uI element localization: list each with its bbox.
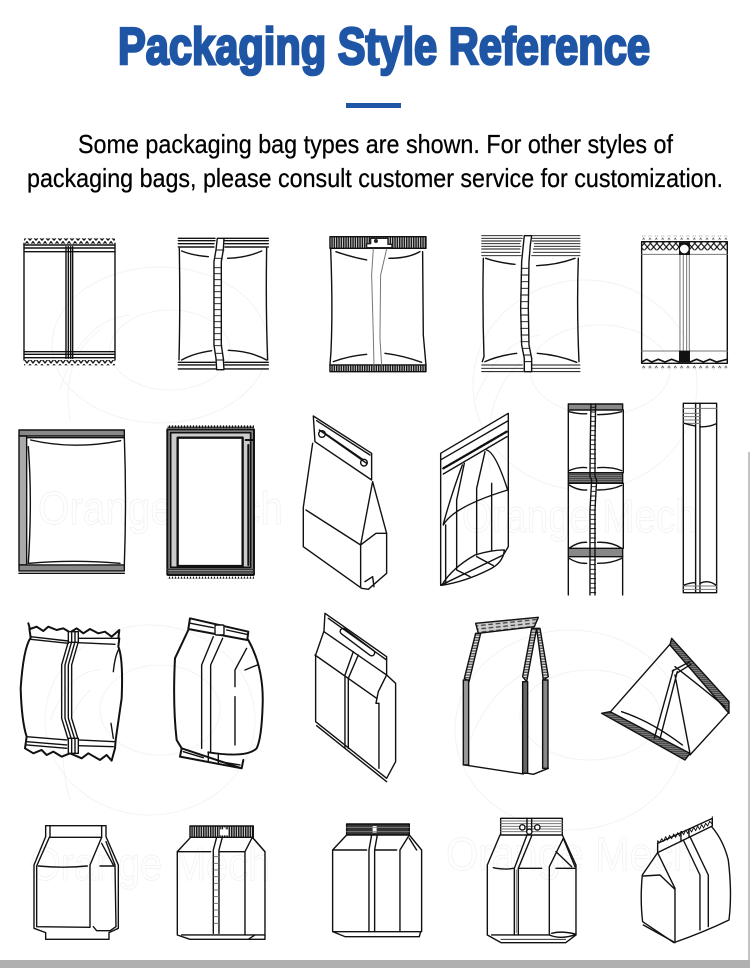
bag 5: serrated bag with round hang hole and dark seam ends	[642, 236, 727, 370]
watermark: Orange Mech text row 4 left: Orange Mech	[30, 838, 270, 890]
right edge line	[748, 452, 750, 960]
bag 1: three-side seal with serrated edges	[24, 238, 115, 365]
bottom grey bar	[0, 960, 750, 968]
subtitle line 1: Some packaging bag types are shown. For other styles of	[78, 129, 674, 159]
bag 12: pillow bag with serrated crimp	[21, 623, 122, 761]
bag 13: bottle-shaped gusset bag	[174, 618, 263, 768]
divider bar	[346, 103, 401, 108]
watermark: Orange Mech text row 2 left: Orange Mech	[38, 482, 283, 534]
bag 15: block-bottom bag with hatched seals	[463, 617, 548, 774]
bag 4: pillow bag with ribbed seal	[482, 236, 580, 372]
bag 6: flat pouch with grey seal bands	[19, 430, 125, 573]
bag 18: square-bottom bag with hatched seal and euro slot	[177, 826, 265, 939]
bag 8: stand-up zipper pouch with flat bottom	[303, 416, 387, 589]
bag 11: narrow stick pack	[683, 403, 717, 593]
bag 19: square-bottom bag with dark seal	[333, 824, 422, 937]
bag 21: side gusset coffee bag with serrated top	[641, 817, 730, 943]
bag 3: pillow bag with hatched seals and hang hole	[330, 237, 426, 372]
bag 10: continuous pillow bags with chain seam	[568, 404, 623, 595]
bag 7: four-side seal pouch with serrated edge	[167, 425, 254, 579]
watermark: swirl logos	[45, 267, 697, 830]
bag 20: square-bottom bag with ribbed seal and hang holes	[487, 818, 576, 943]
bag 2: pillow bag with ladder seam	[178, 238, 268, 370]
bag 9: stand-up zipper doypack	[441, 413, 508, 585]
bag 14: gusset bag with handle slot	[315, 613, 396, 782]
watermark: Orange Mech text row 2 right: Orange Mech	[462, 490, 697, 542]
bag 16: tetrahedron pyramid bag	[602, 638, 729, 760]
watermark: Orange Mech text row 4 right: Orange Mech	[446, 828, 696, 880]
bag 17: block-bottom box pouch	[34, 826, 118, 939]
